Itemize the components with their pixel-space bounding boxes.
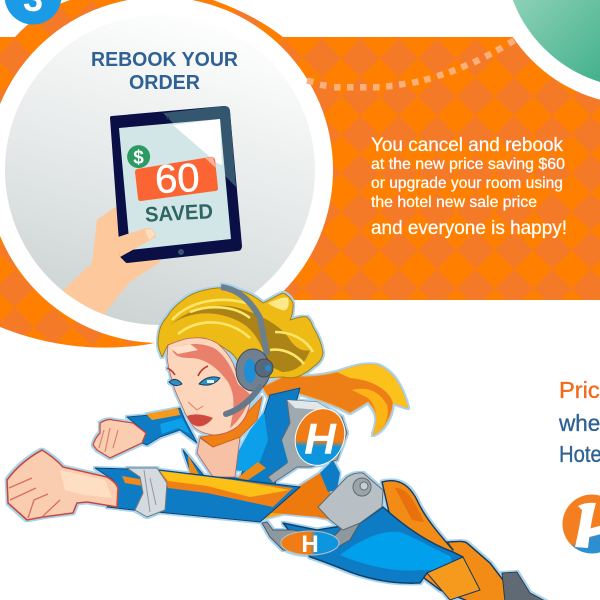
label: saved: SAVED	[144, 200, 214, 227]
front arm and fist	[7, 450, 300, 522]
step number badge	[4, 0, 62, 24]
icon: hand holding tablet	[62, 207, 160, 314]
discount tag	[135, 157, 218, 201]
back arm	[93, 408, 197, 458]
illustration: flying superhero	[7, 287, 547, 600]
eyes	[169, 379, 182, 386]
text block: cancel and rebook: You cancel and rebook	[371, 135, 563, 156]
chest shield with emblem	[268, 400, 353, 483]
icon: dollar badge: $	[133, 148, 144, 168]
leg	[250, 481, 547, 600]
face	[167, 338, 257, 435]
hip and belt	[262, 460, 383, 558]
lips	[187, 414, 213, 426]
dotted path	[306, 38, 516, 90]
panel: top-right green circle	[487, 0, 600, 105]
hair	[158, 288, 323, 378]
text block: cancel and rebook: the hotel new sale price	[371, 194, 537, 211]
text block: cancel and rebook: and everyone is happy!	[371, 218, 567, 239]
text block: bottom right	[558, 377, 600, 467]
icon: tablet	[112, 106, 240, 261]
hip emblem	[281, 531, 339, 555]
text block: cancel and rebook: at the new price saving $60	[371, 156, 565, 173]
text block: cancel and rebook: or upgrade your room using	[371, 175, 563, 192]
text block: cancel and rebook	[371, 135, 567, 239]
hip and belt: H	[301, 531, 319, 558]
heading: rebook your order: REBOOK YOUR	[91, 49, 239, 71]
patterned orange band	[0, 0, 600, 348]
heading: rebook your order: ORDER	[129, 72, 201, 94]
torso	[183, 388, 300, 500]
heading: rebook your order	[91, 49, 239, 94]
chest shield with emblem: H	[304, 415, 337, 464]
panel: rebook circle	[0, 0, 333, 343]
headset	[221, 287, 273, 414]
icon: dollar badge	[127, 145, 150, 168]
cape	[262, 364, 408, 435]
icon: logo	[562, 494, 600, 554]
number: 60: 60	[154, 156, 201, 202]
thumb	[118, 228, 156, 257]
